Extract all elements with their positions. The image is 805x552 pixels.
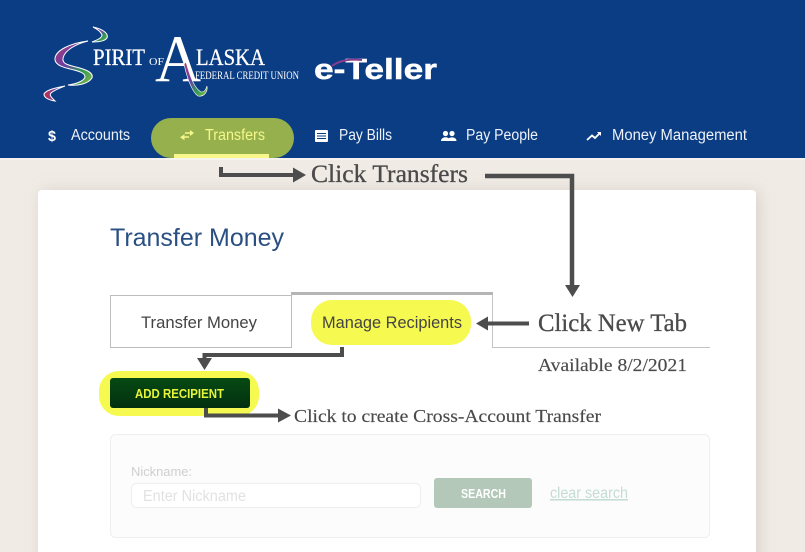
input: Enter Nickname (132, 484, 420, 508)
button: Search: SEARCH (461, 486, 506, 501)
nav: Pay Bills: Pay Bills (339, 127, 392, 144)
button: Add Recipient: ADD RECIPIENT (135, 386, 224, 401)
arrow: Transfers to label (221, 167, 296, 175)
nav: Transfers: Transfers (205, 127, 265, 144)
nav: Pay Bills (315, 127, 392, 144)
nav: Pay People: Pay People (466, 127, 538, 144)
logo: Spirit of Alaska: PIRIT (93, 45, 145, 70)
nav: Accounts (48, 127, 130, 145)
tab: Manage Recipients: Manage Recipients (322, 313, 462, 332)
heading: Transfer Money: Transfer Money (110, 224, 284, 252)
logo: Spirit of Alaska: LASKA (196, 45, 265, 70)
tab: Manage Recipients (291, 292, 710, 348)
arrow: to Manage Recipients (476, 316, 529, 330)
button: Add Recipient (99, 371, 259, 416)
nav: Accounts: Accounts (71, 127, 130, 144)
logo: Spirit of Alaska: OF (149, 57, 164, 68)
panel: search (110, 434, 710, 538)
label: Nickname: Nickname: (131, 464, 192, 479)
link: clear search: clear search (550, 485, 628, 502)
nav: Transfers (180, 127, 265, 144)
arrow head: Transfers (293, 168, 306, 182)
input: Enter Nickname: Enter Nickname (143, 488, 246, 505)
nav: Money Management: Money Management (612, 127, 748, 144)
callout: Click New Tab: Click New Tab (538, 310, 687, 337)
arrow: Click Transfers to new tab (485, 176, 580, 297)
panel: card (38, 190, 756, 552)
arrow: Manage Recipients to Add Recipient (197, 347, 342, 370)
button: Search (434, 478, 532, 508)
logo: e-Teller: e-Teller (314, 54, 437, 86)
tab: Transfer Money (110, 296, 292, 348)
nav: Pay People (441, 127, 538, 144)
callout: Click Transfers: Click Transfers (311, 161, 468, 188)
panel: header (0, 0, 805, 160)
note: cross-account transfer: Click to create Cross-Account Transfer (294, 406, 601, 426)
logo: Spirit of Alaska: FEDERAL CREDIT UNION (195, 68, 299, 82)
note: Available date: Available 8/2/2021 (538, 355, 687, 375)
logo: Spirit of Alaska: A (155, 22, 201, 96)
logo: Spirit of Alaska (44, 22, 299, 101)
arrow: Add Recipient to note (206, 408, 291, 422)
nav: active Transfers highlight (151, 118, 294, 158)
nav: Accounts: $ (48, 128, 57, 145)
tab: Transfer Money: Transfer Money (141, 313, 257, 332)
